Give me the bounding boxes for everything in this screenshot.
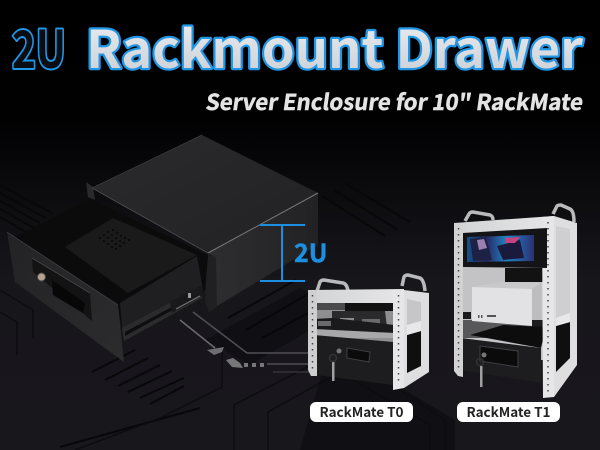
title: Rackmount Drawer: Rackmount Drawer — [86, 8, 583, 83]
T0: upright holes — [312, 295, 398, 385]
title — [12, 8, 583, 83]
drawer: top face — [92, 135, 318, 253]
T1: handles — [465, 212, 493, 221]
drawer: front ear — [205, 253, 217, 312]
RackMate T0 — [308, 275, 429, 390]
title: 2U outline: 2U — [12, 8, 66, 83]
drawer: rear ear — [86, 182, 95, 200]
T0: front top bar and uprights — [308, 289, 404, 303]
T1: key — [482, 352, 486, 358]
connector lines — [180, 312, 310, 372]
T1: interior — [460, 230, 544, 360]
drawer: right face — [208, 193, 318, 306]
2U dimension marker: 2U — [294, 234, 327, 270]
drawer product — [7, 135, 318, 362]
drawer: slide rail — [122, 285, 202, 341]
T1: rack ears — [460, 312, 471, 319]
T1: display panel — [463, 228, 547, 268]
T0: key — [336, 348, 342, 354]
T1: upright holes — [458, 222, 548, 392]
T1: computer — [472, 282, 541, 289]
label: RackMate T0: RackMate T0 — [320, 401, 404, 421]
drawer: front panel — [7, 232, 124, 362]
T1: side frame — [554, 216, 577, 397]
RackMate T1 — [454, 205, 577, 398]
drawer: handle plate — [32, 258, 92, 321]
T1: front top bar and uprights — [454, 216, 554, 233]
T1: drawer — [470, 325, 546, 348]
T0: handles — [317, 280, 348, 291]
drawer: lock — [38, 273, 46, 281]
drawer: vent holes — [99, 229, 130, 250]
T0: rack shelf — [314, 318, 395, 333]
T0: mini PC — [332, 311, 387, 327]
T0: interior — [316, 301, 394, 371]
T0: side frame — [404, 290, 429, 388]
label: RackMate T1: RackMate T1 — [466, 401, 551, 421]
subtitle: Server Enclosure for 10" RackMate — [204, 85, 586, 117]
2U dimension marker — [260, 225, 327, 281]
T0: drawer front — [314, 335, 393, 385]
drawer: interior — [15, 199, 208, 340]
drawer: inner right wall — [120, 256, 203, 340]
